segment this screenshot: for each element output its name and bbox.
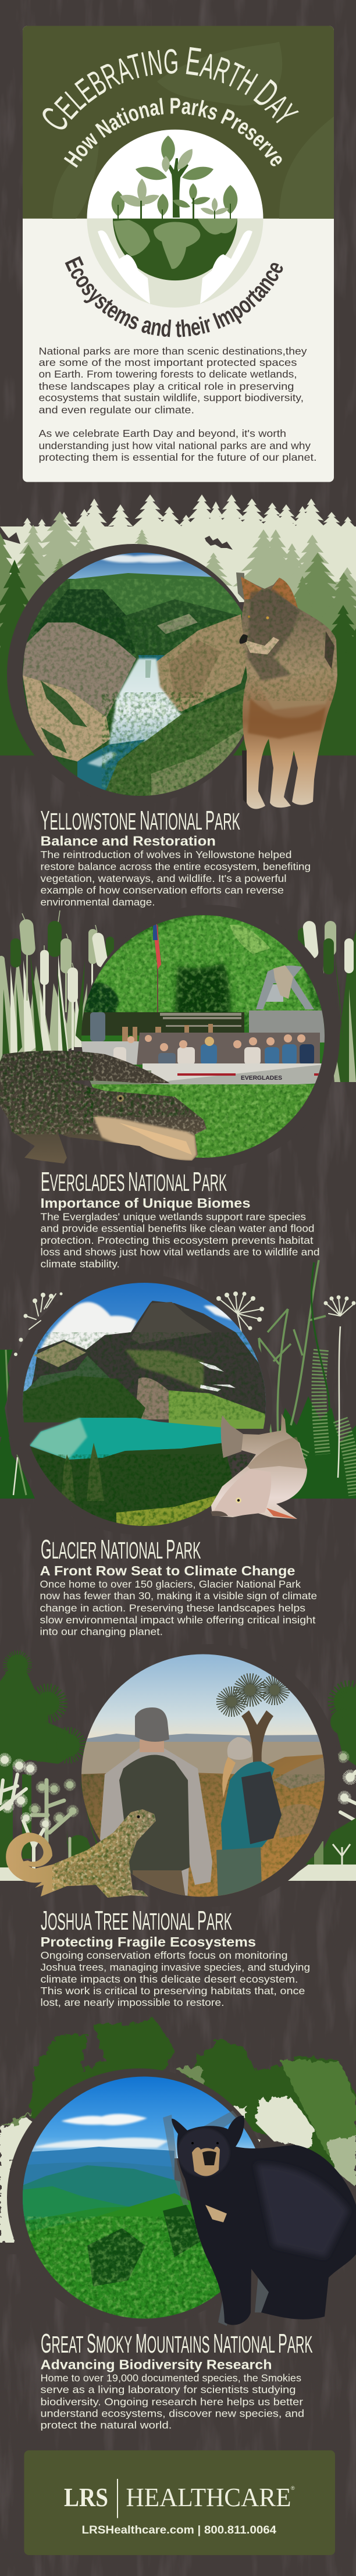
intro text: these landscapes play a critical role in preserving: [38, 380, 294, 392]
body copy: vegetation, waterways, and wildlife. It's a powerful: [41, 873, 286, 884]
joshua tree: [216, 1673, 290, 1763]
logo: LRS Healthcare: ®: [291, 2485, 295, 2491]
plants: wildflowers right: [259, 1260, 356, 1499]
plants: wildflowers left: [0, 1350, 35, 1499]
body copy: climate impacts on this delicate desert ecosystem.: [41, 1973, 298, 1985]
body copy: Home to over 19,000 documented species, the Smokies: [41, 2372, 301, 2384]
body copy: environmental damage.: [41, 896, 155, 908]
body copy: [41, 1211, 320, 1269]
plants: cattails right: [298, 920, 356, 1082]
body copy: The Everglades' unique wetlands support rare species: [41, 1211, 306, 1222]
body copy: climate stability.: [41, 1258, 120, 1269]
body copy: change in action. Preserving these landscapes helps: [40, 1602, 305, 1614]
body copy: protect the natural world.: [41, 2419, 172, 2431]
subheading: Protecting Fragile Ecosystems: [41, 1934, 256, 1949]
subheading: Advancing Biodiversity Research: [41, 2357, 272, 2372]
heading: GREAT SMOKY MOUNTAINS NATIONAL PARK: [41, 2328, 313, 2358]
body copy: loss and shows just how vital wetlands are to wildlife and: [41, 1246, 320, 1258]
subheading: A Front Row Seat to Climate Change: [40, 1563, 296, 1578]
body copy: This work is critical to preserving habitats that, once: [41, 1985, 305, 1997]
section text: Glacier: [40, 1534, 317, 1637]
subtitle: How National Parks Preserve: How National Parks Preserve: [64, 98, 282, 168]
body copy: serve as a living laboratory for scientists studying: [41, 2383, 296, 2395]
body copy: Once home to over 150 glaciers, Glacier National Park: [40, 1578, 301, 1590]
intro text: protecting them is essential for the future of our planet.: [38, 451, 316, 463]
body copy: understand ecosystems, discover new species, and: [41, 2408, 304, 2420]
oval band: Joshua Tree: [195, 1644, 340, 1907]
intro text: understanding just how vital national parks are and why: [38, 440, 311, 451]
body copy: The reintroduction of wolves in Yellowstone helped: [41, 849, 292, 860]
body copy: and provide essential benefits like clean water and flood: [41, 1223, 314, 1234]
body copy: [41, 1949, 310, 2008]
body copy: now has fewer than 30, making it a visible sign of climate: [40, 1590, 317, 1602]
intro text: [38, 345, 316, 463]
icon: earth with trees in hands: [87, 130, 263, 308]
section text: Smoky Mountains: [41, 2328, 313, 2431]
photo: Everglades airboat: EVERGLADES: [241, 1074, 282, 1081]
body copy: into our changing planet.: [40, 1625, 163, 1637]
logo: LRS Healthcare: [64, 2479, 295, 2518]
heading: JOSHUA TREE NATIONAL PARK: [41, 1905, 232, 1935]
heading: YELLOWSTONE NATIONAL PARK: [41, 805, 240, 835]
icon: wolf: [236, 572, 340, 812]
icon: trout: [211, 1414, 307, 1519]
heading: GLACIER NATIONAL PARK: [41, 1534, 201, 1564]
oval band: Glacier: [7, 1274, 272, 1535]
intro text: are some of the most important protected spaces: [38, 357, 297, 368]
body copy: slow environmental impact while offering critical insight: [40, 1614, 316, 1625]
body copy: restore balance across the entire ecosystem, benefiting: [41, 861, 311, 873]
photo: Joshua Tree hikers: [76, 1652, 332, 1902]
subtitle: Ecosystems and their Importance: Ecosystems and their Importance: [65, 256, 283, 337]
icon: alligator: [0, 1047, 209, 1166]
plants: Joshua trees right: [286, 1681, 356, 1881]
body copy: protection. Protecting this ecosystem prevents habitat: [41, 1234, 314, 1246]
oval band: Everglades: [81, 905, 340, 1168]
plants: Joshua trees left: [0, 1650, 113, 1882]
heading: EVERGLADES NATIONAL PARK: [41, 1166, 227, 1197]
subheading: Balance and Restoration: [41, 833, 216, 848]
photo: Smoky Mountains vista: [23, 2077, 255, 2319]
body copy: lost, are nearly impossible to restore.: [41, 1997, 225, 2008]
body copy: biodiversity. Ongoing research here helps us better: [41, 2396, 303, 2408]
intro text: National parks are more than scenic destinations,they: [38, 345, 307, 357]
intro text: and even regulate our climate.: [38, 404, 194, 416]
logo: LRS Healthcare: HEALTHCARE: [126, 2482, 291, 2512]
subheading: Importance of Unique Biomes: [41, 1196, 250, 1211]
body copy: Joshua trees, managing invasive species, and studying: [41, 1962, 310, 1973]
body copy: [41, 2372, 304, 2431]
body copy: [40, 1578, 317, 1637]
section text: Everglades: [41, 1166, 320, 1269]
intro text: on Earth. From towering forests to delicate wetlands,: [38, 368, 297, 380]
oval band: Yellowstone: [7, 544, 261, 805]
photo: Yellowstone falls: [23, 553, 247, 796]
plants: cattails left: [0, 910, 114, 1065]
man: [100, 1707, 212, 1902]
contact line: LRSHealthcare.com | 800.811.0064: [81, 2524, 276, 2536]
photo: Glacier lake: [23, 1283, 266, 1526]
woman: [216, 1737, 282, 1902]
section text: Yellowstone: [41, 805, 311, 908]
footer panel: [24, 2450, 335, 2555]
oval band: Smoky Mountains: [7, 2069, 272, 2327]
title: Celebrating Earth Day: CELEBRATING EARTH DAY: [42, 47, 299, 129]
forest scene: Smoky Mountains: [0, 2019, 356, 2254]
icon: dandelion seed heads: [14, 1291, 264, 1356]
body copy: Ongoing conservation efforts focus on monitoring: [41, 1949, 287, 1961]
icon: black bear: [163, 2109, 356, 2330]
forest scene: Yellowstone: [0, 494, 356, 756]
body copy: example of how conservation efforts can reverse: [41, 884, 284, 896]
intro text: ecosystems that sustain wildlife, support biodiversity,: [38, 392, 304, 404]
panel: header: [23, 26, 334, 482]
intro text: As we celebrate Earth Day and beyond, it's worth: [38, 428, 286, 439]
photo: Everglades airboat: [76, 910, 332, 1164]
logo: LRS Healthcare: LRS: [64, 2482, 108, 2512]
section text: Joshua Tree: [41, 1905, 310, 2008]
body copy: [41, 849, 311, 908]
icon: lizard: [3, 1806, 160, 1899]
